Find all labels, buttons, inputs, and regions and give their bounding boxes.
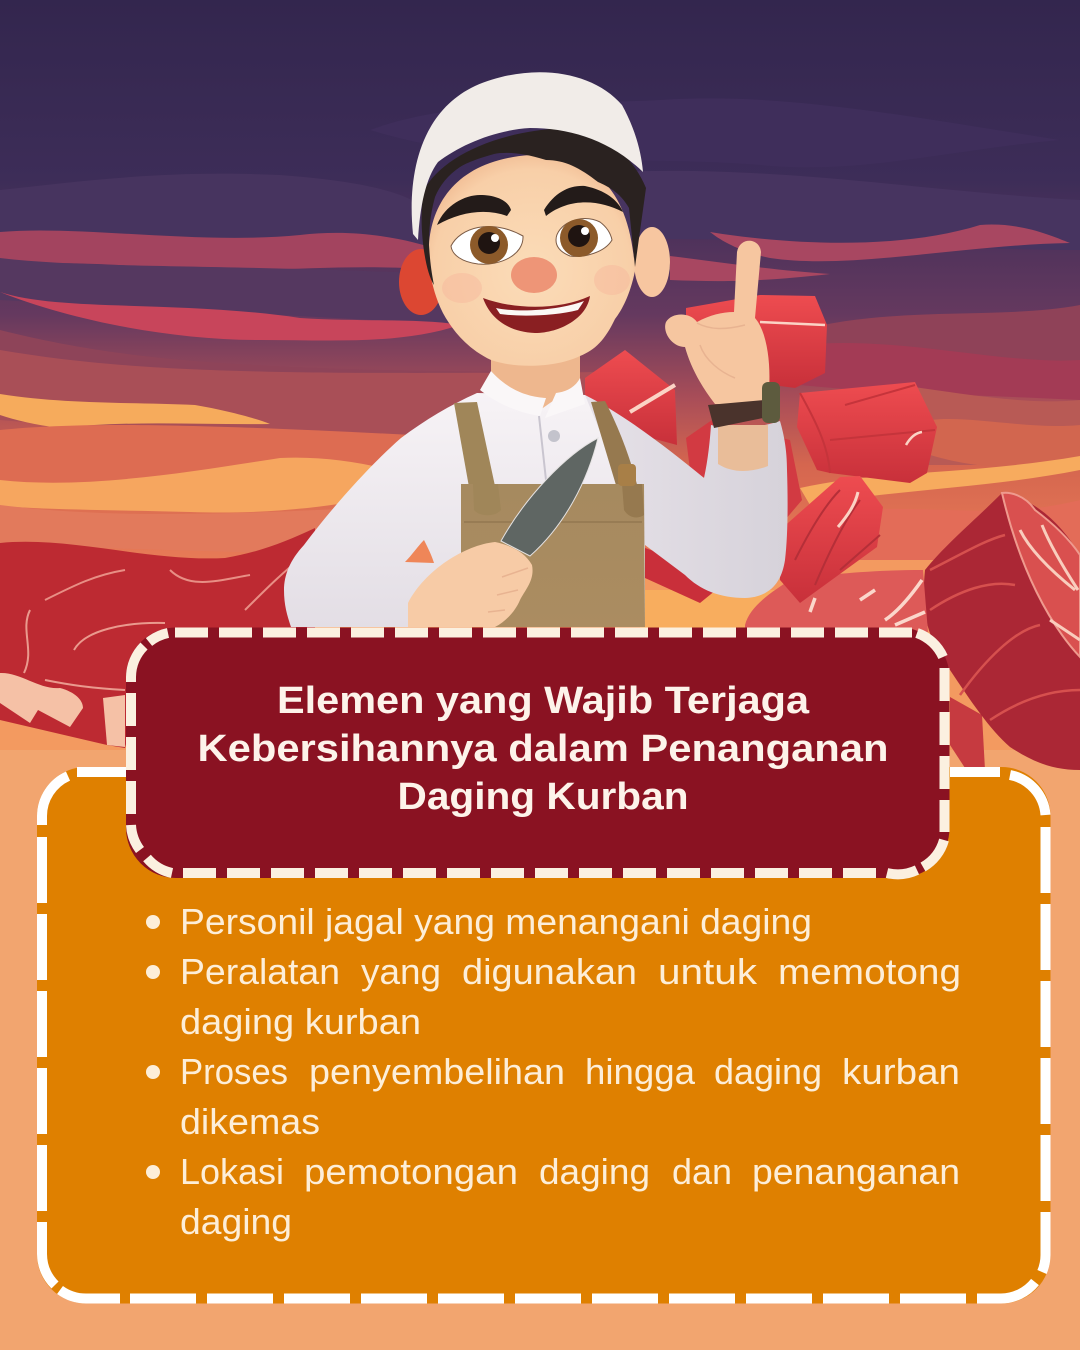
eyebrows (437, 195, 511, 225)
shirt placket line (539, 416, 546, 480)
left eye (451, 227, 523, 264)
steak fat (0, 673, 83, 727)
watch (708, 400, 768, 428)
list item 4: pemotongan (304, 1151, 518, 1192)
forearm inside cuff (718, 425, 768, 471)
face (429, 155, 635, 366)
meat: left steak (0, 528, 315, 748)
right eye (556, 218, 612, 256)
cube: behind raised hand (686, 295, 827, 388)
bullets (146, 915, 160, 1179)
collar (480, 371, 585, 418)
raised hand (665, 241, 769, 404)
meat: flying cubes (585, 295, 937, 603)
list item 2: daging kurban (180, 1001, 421, 1042)
apron bib (461, 484, 645, 627)
panel: list (42, 772, 1046, 1298)
meat: right big chunk (924, 493, 1080, 770)
mouth (483, 296, 590, 333)
knife (501, 438, 598, 556)
list item 4: penanganan (752, 1151, 960, 1192)
cube: behind forearm (686, 420, 802, 520)
list item 4: daging (180, 1201, 292, 1242)
list item 3: penyembelihan (309, 1051, 565, 1092)
cube: lower right (780, 476, 883, 603)
title border dashes (131, 632, 944, 874)
bullet list (146, 901, 961, 1242)
list item 4: dan (672, 1151, 732, 1192)
list item 1: Personil jagal yang menangani daging (180, 901, 812, 942)
nose (511, 257, 557, 293)
gap between arm and torso (405, 540, 434, 563)
list item 3: daging (714, 1051, 822, 1092)
chef character (284, 72, 788, 627)
meat: marbled slab (745, 570, 928, 632)
cheeks (442, 273, 482, 303)
list item 2: Peralatan (180, 951, 340, 992)
list item 3: hingga (585, 1051, 696, 1092)
torso and left arm (284, 393, 645, 627)
hair (422, 128, 646, 285)
title: Elemen yang Wajib Terjaga (277, 680, 810, 722)
list item 2: yang (361, 951, 441, 992)
neck (491, 345, 580, 410)
title (198, 680, 888, 818)
button (548, 430, 560, 442)
list item 4: Lokasi (180, 1151, 284, 1192)
list item 2: memotong (778, 951, 961, 992)
cap (412, 72, 643, 240)
list item 3: Proses (180, 1051, 288, 1092)
right upper arm and sleeve (585, 395, 788, 598)
list item 2 (180, 951, 961, 1042)
title: Kebersihannya dalam Penanganan (198, 728, 888, 770)
list item 2: untuk (658, 951, 758, 992)
cube: behind shoulder (585, 350, 677, 445)
cube: right large (797, 382, 937, 483)
list item 4 (180, 1151, 960, 1242)
panel: title (131, 632, 944, 874)
left hand (408, 542, 533, 627)
list item 3 (180, 1051, 960, 1142)
apron straps (454, 402, 501, 515)
panel border dashes (42, 772, 1046, 1298)
list item 4: daging (539, 1151, 650, 1192)
ears (399, 249, 443, 315)
list item 3: kurban (842, 1051, 960, 1092)
apron buckle (618, 464, 636, 486)
list item 3: dikemas (180, 1101, 320, 1142)
title: Daging Kurban (398, 776, 688, 818)
cube: under elbow (645, 548, 716, 603)
list item 2: digunakan (462, 951, 637, 992)
